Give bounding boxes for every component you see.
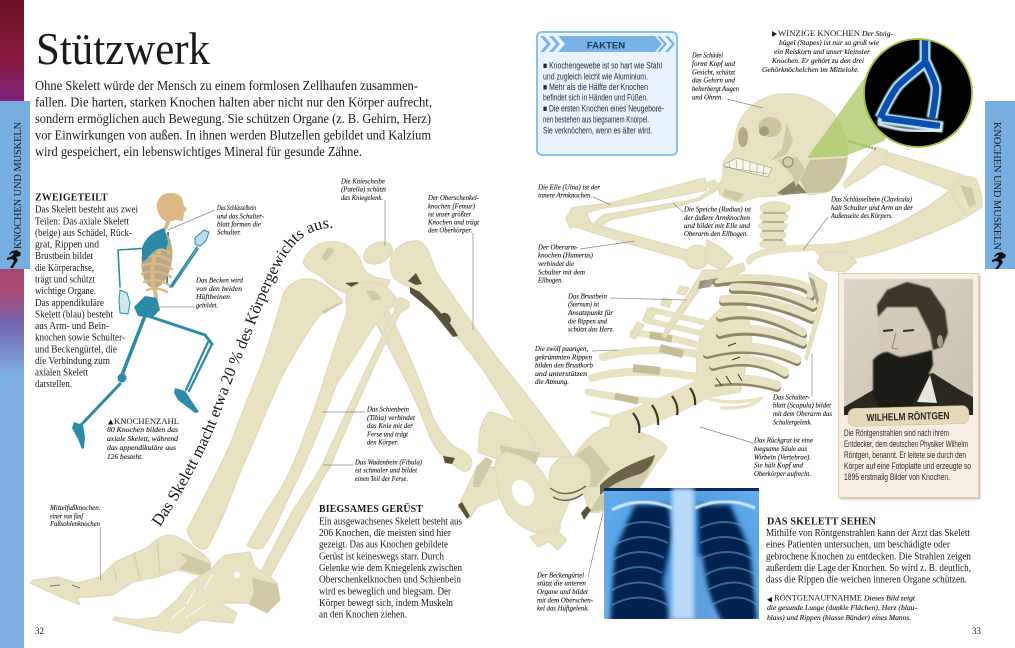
caption: Schädel: Der Schädel [691,51,723,60]
portrait [844,279,973,415]
caption: Wadenbein [323,457,423,483]
caption: Schlüsselbein small skeleton: blatt formen die [217,220,262,228]
section: Das Skelett sehen: gebrochene Knochen zu entdecken. Die Strahlen zeigen [766,550,972,562]
right section tab: KNOCHEN UND MUSKELN [991,122,1002,250]
caption: Oberschenkel [427,193,480,330]
section: Biegsames Gerüst: BIEGSAMES GERÜST [319,502,423,515]
section: Zweigeteilt: wichtige Organe. [35,285,96,297]
caption: Schulterblatt: Schultergelenk. [773,417,812,426]
section: Zweigeteilt: darstellen. [35,378,72,390]
caption: Schienbein: das Knie mit der [367,421,413,430]
caption: Schulterblatt [772,353,832,426]
panel: Fakten [537,32,677,155]
title: Stützwerk [36,23,210,74]
caption: Speiche: der äußere Armknochen [684,213,750,222]
caption: Kniescheibe: Die Kniescheibe [340,176,386,185]
left section tab [0,101,30,269]
panel: Wilhelm Röntgen [838,274,980,500]
caption: Knochenzahl: axiale Skelett, während [107,434,178,443]
panel: Fakten: ■ Die ersten Knochen eines Neugebore- [543,104,664,114]
caption: Wadenbein: Das Wadenbein (Fibula) [354,457,423,466]
caption: Schienbein [322,405,416,447]
section: Biegsames Gerüst: Ein ausgewachsenes Skelett besteht aus [319,515,462,527]
caption: Winzige Knochen: ein Reiskorn und unser kleinster [774,47,870,56]
caption: Oberarm: verbindet die [538,259,575,268]
caption: Rückgrat: Oberkörper aufrecht. [754,469,811,478]
caption: Kniescheibe [340,176,387,246]
caption: Knochenzahl: KNOCHENZAHL [114,417,179,426]
caption: Röntgenaufnahme: blass) und Rippen (blasse Bänder) eines Manns. [767,613,911,622]
panel: Wilhelm Röntgen: Röntgen, benannt. Er leitete sie durch den [844,450,966,460]
curved headline: Das Skelett macht etwa 20 % des Körpergewichts aus. [151,220,332,527]
section: Zweigeteilt: aus Arm- und Bein- [35,320,109,332]
section: Biegsames Gerüst: an den Knochen ziehen. [319,609,407,621]
section: Biegsames Gerüst: wird es beweglich und biegsam. Der [319,585,451,597]
caption: Rippen [534,344,618,386]
vertebra beads behind lens [848,141,876,149]
caption: Mittelfuß: Fußsohlenknochen [49,519,100,528]
left ribs [588,310,717,418]
caption: Beckengürtel: stützt die unteren [537,579,586,588]
caption: Schlüsselbein [803,195,913,250]
caption: Schulterblatt: Das Schulter- [772,392,811,401]
caption: Rückgrat: Das Rückgrat ist eine [753,436,814,445]
skull [706,94,848,202]
caption: Becken: Hüftbeinen [195,292,230,301]
caption: Speiche [673,203,752,238]
section: Zweigeteilt: trägt und schützt [35,274,95,286]
section: Das Skelett sehen: außerdem die Lage der Knochen. So wird z. B. deutlich, [766,562,971,574]
name banner [848,405,969,427]
caption: Beckengürtel: Der Beckengürtel [536,570,584,579]
icon: runner [7,250,21,268]
caption: Schienbein: Das Schienbein [366,405,409,414]
panel: Fakten: und zugleich leicht wie Aluminium. [543,71,648,81]
caption: Speiche: Die Speiche (Radius) ist [683,205,752,214]
caption: Schlüsselbein small skeleton: Schulter. [217,228,241,237]
name banner: WILHELM RÖNTGEN [866,409,950,424]
caption: Beckengürtel: Organe und bildet [537,587,589,596]
intro text: vor Einwirkungen von außen. In ihnen werden Blutzellen gebildet und Kalzium [35,128,432,142]
large skeleton [30,94,982,633]
caption: Oberarm: Der Oberarm- [537,242,579,251]
caption: Schulterblatt: blatt (Scapula) bildet [773,401,832,410]
section: Biegsames Gerüst: gezeigt. Das aus Knochen gebildete [319,539,448,551]
clavicle [749,247,833,261]
section: Biegsames Gerüst: Oberschenkelknochen und Schienbein [319,574,462,586]
caption: Elle [537,182,611,205]
caption: Rippen: die Atmung. [535,377,569,386]
right ribs [703,278,813,408]
caption: Schlüsselbein small skeleton: Das Schlüsselbein [216,203,256,212]
foot two [113,552,280,633]
caption: Brustbein: schützt das Herz. [568,325,614,334]
section: Zweigeteilt: die Verbindung zum [35,355,111,367]
section: Das Skelett sehen: DAS SKELETT SEHEN [767,516,876,527]
section: Biegsames Gerüst: Körper bewegt sich, indem Muskeln [319,597,454,609]
section: Zweigeteilt: Das appendikuläre [35,297,104,309]
caption: Rückgrat [700,427,814,478]
section: Das Skelett sehen: dass die Rippen die weichen inneren Organe schützen. [766,574,967,586]
caption: Knochenzahl: das appendikuläre aus [107,443,176,452]
caption: Oberschenkel: den Oberkörper. [428,226,472,235]
caption: Schienbein: den Körper. [367,438,398,447]
caption: Schlüsselbein: Außenseite des Körpers. [830,211,893,220]
section: Biegsames Gerüst: Gelenke wie dem Kniegelenk zwischen [319,562,462,574]
section: Zweigeteilt: Das Skelett besteht aus zwei [35,204,138,216]
panel: Wilhelm Röntgen: Körper auf eine Fotoplatte und erzeugte so [844,461,971,471]
caption: Beckengürtel [536,513,603,613]
intro text: Ohne Skelett würde der Mensch zu einem formlosen Zellhaufen zusammen- [35,78,418,93]
caption: Schlüsselbein: hält Schulter und Arm an der [831,203,913,212]
caption: Brustbein: Ansatzpunkt für [567,308,613,317]
section: Das Skelett sehen [766,516,972,586]
right section tab [985,101,1015,269]
caption: Mittelfuß [49,503,101,580]
caption: Winzige Knochen [762,29,894,74]
caption: Knochenzahl: 80 Knochen bilden das [107,425,178,434]
page number left: 32 [35,626,44,636]
tibia one [187,279,343,549]
green zoom wedge [807,76,918,158]
rear femur [303,242,472,471]
caption: Röntgenaufnahme: die gesunde Lunge (dunkle Flächen), Herz (blau- [767,603,918,612]
caption: Winzige Knochen: Der Steig- [861,29,894,38]
shoulder and arm: viewer left [566,178,733,270]
caption: Schädel: und Ohren. [692,92,723,101]
caption: Rippen: bilden den Brustkorb [535,361,593,370]
front femur [390,241,573,457]
caption: Schienbein: Ferse und trägt [366,429,409,438]
caption: Rippen: gekrümmten Rippen [535,353,592,362]
section: Zweigeteilt: Teilen: Das axiale Skelett [35,215,129,227]
fibula [258,298,409,577]
section: Biegsames Gerüst: 206 Knochen, die meisten sind hier [319,527,451,539]
caption: Oberarm [537,241,635,285]
caption: Kniescheibe: das Kniegelenk. [341,193,383,202]
left section tab: KNOCHEN UND MUSKELN [13,122,24,249]
chest x-ray [604,488,759,622]
caption: Brustbein: die Rippen und [568,316,607,325]
page number right: 33 [972,626,982,636]
section: Zweigeteilt: Brustbein bildet [35,250,93,262]
lumbar spine [620,388,704,433]
caption: Schädel: formt Kopf und [692,59,735,68]
foot one [30,535,212,605]
banner: FAKTEN [587,41,625,52]
section: Biegsames Gerüst [319,502,462,621]
caption: Oberschenkel: Der Oberschenkel- [427,193,480,202]
section: Zweigeteilt: axialen Skelett [35,367,88,379]
panel: Fakten: Sie verknöchern, wenn es älter wird. [543,125,652,135]
caption: Winzige Knochen: Knochen. Er gehört zu den drei [771,56,864,65]
section: Zweigeteilt: die Körperachse, [35,262,94,274]
section: Zweigeteilt: (beige) aus Schädel, Rück- [35,227,132,239]
shoulder and arm: viewer right [815,147,982,272]
caption: Röntgenaufnahme: Dieses Bild zeigt [863,594,916,603]
intro text: fallen. Die harten, starken Knochen halten aber nicht nur den Körper aufrecht, [35,94,432,110]
caption: Speiche: und bildet mit Elle und [684,221,750,230]
section: Zweigeteilt [35,192,138,390]
caption: Knochenzahl [107,417,179,461]
small running skeleton [72,193,212,449]
shoulder blade [805,272,827,360]
intro text: wird gespeichert, ein lebenswichtiges Mineral für gesunde Zähne. [35,144,362,159]
section: Das Skelett sehen: eines Patienten untersuchen, um beschädigte oder [766,539,950,551]
patella [360,238,396,268]
caption: Oberschenkel: Knochen und trägt [427,218,480,227]
caption: Beckengürtel: kel das Hüftgelenk. [537,604,589,613]
left edge strip [0,0,24,648]
caption: Speiche: Oberarm den Ellbogen. [684,229,748,238]
caption: Elle: innere Armknochen. [538,190,592,199]
section: Zweigeteilt: Skelett (blau) besteht [35,308,113,320]
tibia two [247,282,398,549]
caption: Oberarm: Ellbogen. [537,276,563,285]
caption: Rückgrat: Sie hält Kopf und [754,461,803,470]
section: Biegsames Gerüst: Gerüst ist keineswegs starr. Durch [319,550,445,562]
caption: Winzige Knochen: bügel (Stapes) ist nur so groß wie [779,38,880,47]
panel: Fakten: befindet sich in Händen und Füßen. [543,93,648,103]
icon: runner [992,252,1006,269]
panel: Fakten: ■ Mehr als die Hälfte der Knochen [543,82,648,92]
caption: Mittelfuß: Mittelfußknochen: [49,503,101,512]
caption: Rippen: Die zwölf paarigen, [534,344,588,353]
caption: Wadenbein: einen Teil der Ferse. [355,474,408,483]
caption: Rückgrat: biegsame Säule aus [754,444,807,453]
caption: Schlüsselbein small skeleton: und das Schulter- [217,211,265,220]
panel: Fakten: nen bestehen aus biegsamem Knorpel. [543,114,649,124]
caption: Becken: gebildet. [196,301,218,310]
caption: Schlüsselbein small skeleton [168,203,265,237]
caption: Beckengürtel: mit dem Oberschen- [537,595,594,604]
caption: Schulterblatt: mit dem Oberarm das [773,409,832,418]
icon circle: stapes bone [864,38,972,147]
neck vertebrae [759,202,790,249]
caption: Schlüsselbein: Das Schlüsselbein (Clavicula) [830,195,913,204]
caption: Schädel [691,51,763,108]
panel: Wilhelm Röntgen: 1895 erstmalig Bilder von Knochen. [844,472,950,482]
caption: Röntgenaufnahme [767,594,918,622]
caption: Knochenzahl: 126 besteht. [107,452,143,461]
caption: Brustbein: Das Brustbein [567,291,607,300]
section: Das Skelett sehen: Mithilfe von Röntgenstrahlen kann der Arzt das Skelett [766,527,970,539]
caption: Winzige Knochen: WINZIGE KNOCHEN [778,29,860,38]
section: Zweigeteilt: und Beckengürtel, die [35,343,117,355]
intro text: sondern ermöglichen auch Bewegung. Sie schützen Organe (z. B. Gehirn, Herz) [35,111,431,126]
caption: Schädel: Gesicht, schützt [692,67,736,76]
caption: Röntgenaufnahme: RÖNTGENAUFNAHME [774,594,862,603]
caption: Becken: Das Becken wird [195,276,243,285]
panel: Wilhelm Röntgen: Die Röntgenstrahlen sind nach ihrem [844,428,949,438]
caption: Kniescheibe: (Patella) schützt [341,185,387,194]
caption: Schädel: das Gehirn und [692,76,735,85]
caption: Brustbein [567,291,687,334]
caption: Brustbein: (Sternum) ist [568,300,600,309]
caption: Becken [152,276,243,310]
caption: Oberschenkel: knochen (Femur) [428,201,476,210]
section: Zweigeteilt: knochen sowie Schulter- [35,332,125,344]
section: Zweigeteilt: grat, Rippen und [35,239,100,251]
caption: Schienbein: (Tibia) verbindet [367,413,416,422]
caption: Rückgrat: Wirbeln (Vertebrae). [754,452,811,461]
caption: Winzige Knochen: Gehörknöchelchen im Mittelohr. [762,65,859,74]
sternum [630,263,745,339]
caption: Rippen: und unterstützen [535,369,587,378]
pelvis [458,412,667,550]
caption: Mittelfuß: einer von fünf [50,511,84,520]
section: Zweigeteilt: ZWEIGETEILT [35,192,108,204]
teeth [723,158,772,177]
caption: Oberschenkel: ist unser größter [428,209,471,218]
caption: Elle: Die Elle (Ulna) ist der [537,182,600,191]
panel: Fakten: ■ Knochengewebe ist so hart wie Stahl [543,60,662,70]
caption: Oberarm: Schulter mit dem [538,267,585,276]
intro text [35,78,432,159]
spine core behind ribs [696,298,752,398]
caption: Wadenbein: ist schmaler und bildet [355,466,418,475]
caption: Becken: von den beiden [196,284,242,293]
caption: Schädel: beherbergt Augen [692,84,739,93]
caption: Oberarm: knochen (Humerus) [538,251,594,260]
